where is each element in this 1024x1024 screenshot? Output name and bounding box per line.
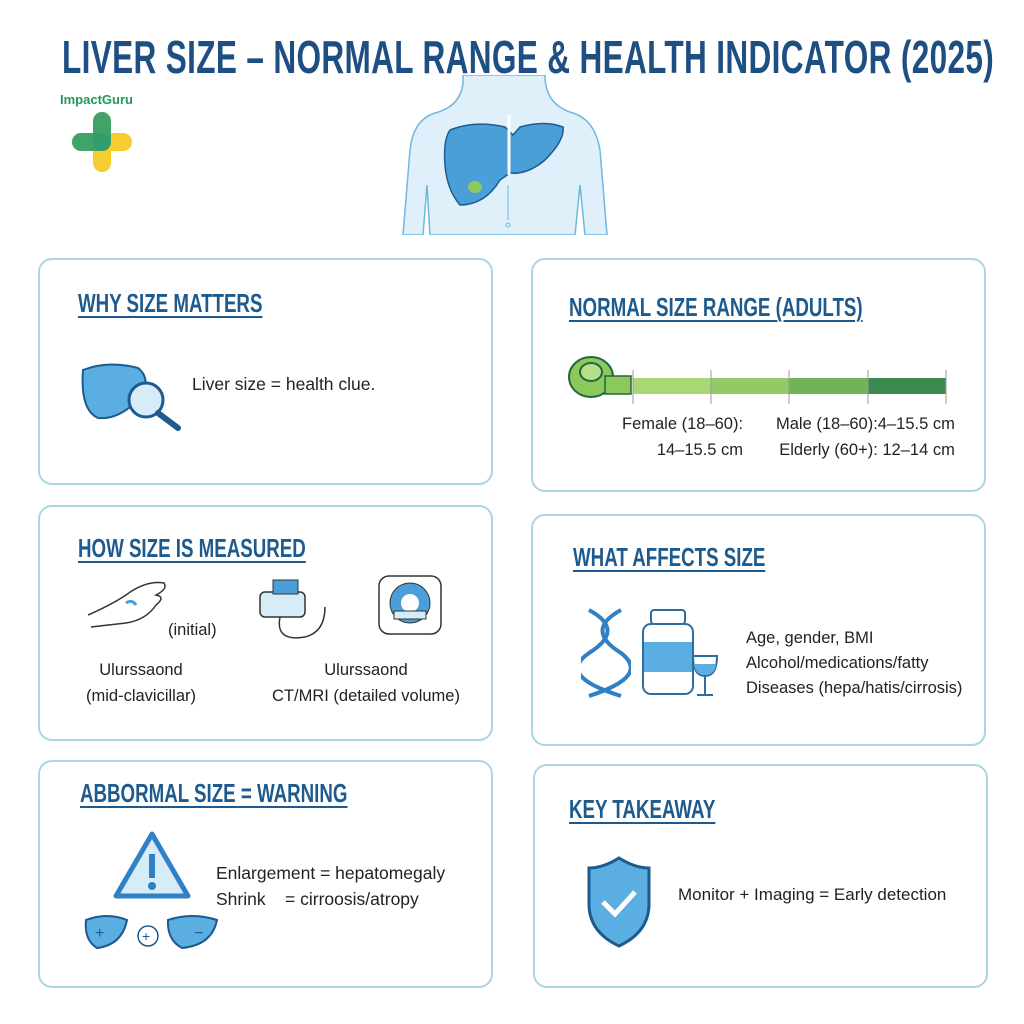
title: LIVER SIZE – NORMAL RANGE & HEALTH INDICATOR (2025) — [62, 31, 994, 83]
panel: normal size range: 14–15.5 cm — [657, 441, 743, 459]
panel: what affects size: Alcohol/medications/fatty — [746, 654, 929, 672]
panel: why size matters: Liver size = health clue. — [192, 374, 375, 394]
panel: how size is measured: Ulurssaond — [99, 661, 183, 679]
panel: abnormal size warning: Shrink = cirroosis/atropy — [216, 889, 419, 909]
panel: how size is measured: (initial) — [168, 621, 217, 639]
panel: normal size range — [531, 258, 986, 492]
panel: abnormal size warning: ABBORMAL SIZE = WARNING — [80, 778, 347, 808]
logo — [60, 92, 133, 172]
icon: shield check — [588, 856, 650, 948]
panel: key takeaway — [533, 764, 988, 988]
panel: how size is measured: Ulurssaond — [324, 661, 408, 679]
icon: CT scanner — [378, 575, 442, 635]
panel: what affects size: Age, gender, BMI — [746, 629, 874, 647]
panel: normal size range: Elderly (60+): 12–14 cm — [779, 441, 955, 459]
panel: how size is measured: HOW SIZE IS MEASURED — [78, 533, 306, 563]
panel: why size matters: WHY SIZE MATTERS — [78, 288, 262, 318]
panel: key takeaway: Monitor + Imaging = Early detection — [678, 885, 946, 904]
panel: normal size range: Male (18–60):4–15.5 cm — [776, 415, 955, 433]
panel: what affects size: Diseases (hepa/hatis/cirrosis) — [746, 679, 962, 697]
panel: abnormal size warning: Enlargement = hepatomegaly — [216, 863, 445, 883]
icon: livers plus minus: + — [95, 925, 104, 942]
icon: livers plus minus: − — [194, 925, 203, 942]
icon: liver magnifier — [82, 364, 181, 431]
icon: DNA — [581, 608, 631, 698]
icon: ultrasound machine — [259, 580, 326, 639]
icon: livers plus minus: + — [142, 928, 150, 944]
panel: normal size range: NORMAL SIZE RANGE (ADULTS) — [569, 292, 863, 322]
panel: why size matters — [38, 258, 493, 485]
icon: hand — [88, 582, 166, 628]
panel: key takeaway: KEY TAKEAWAY — [569, 794, 715, 824]
icon: warning triangle — [114, 832, 190, 898]
panel: normal size range: Female (18–60): — [622, 415, 743, 433]
panel: how size is measured — [38, 505, 493, 741]
icon: measuring tape — [568, 356, 632, 398]
icon: bottle — [642, 609, 694, 695]
body illustration with liver — [402, 75, 608, 235]
panel: how size is measured: CT/MRI (detailed volume) — [272, 687, 460, 705]
panel: what affects size: WHAT AFFECTS SIZE — [573, 542, 765, 572]
icon: livers plus minus — [84, 915, 218, 949]
icon: wine glass — [694, 655, 718, 696]
bar chart: ranges — [632, 370, 946, 404]
logo: ImpactGuru — [60, 92, 133, 107]
panel: abnormal size warning — [38, 760, 493, 988]
panel: what affects size — [531, 514, 986, 746]
panel: how size is measured: (mid-clavicillar) — [86, 687, 196, 705]
